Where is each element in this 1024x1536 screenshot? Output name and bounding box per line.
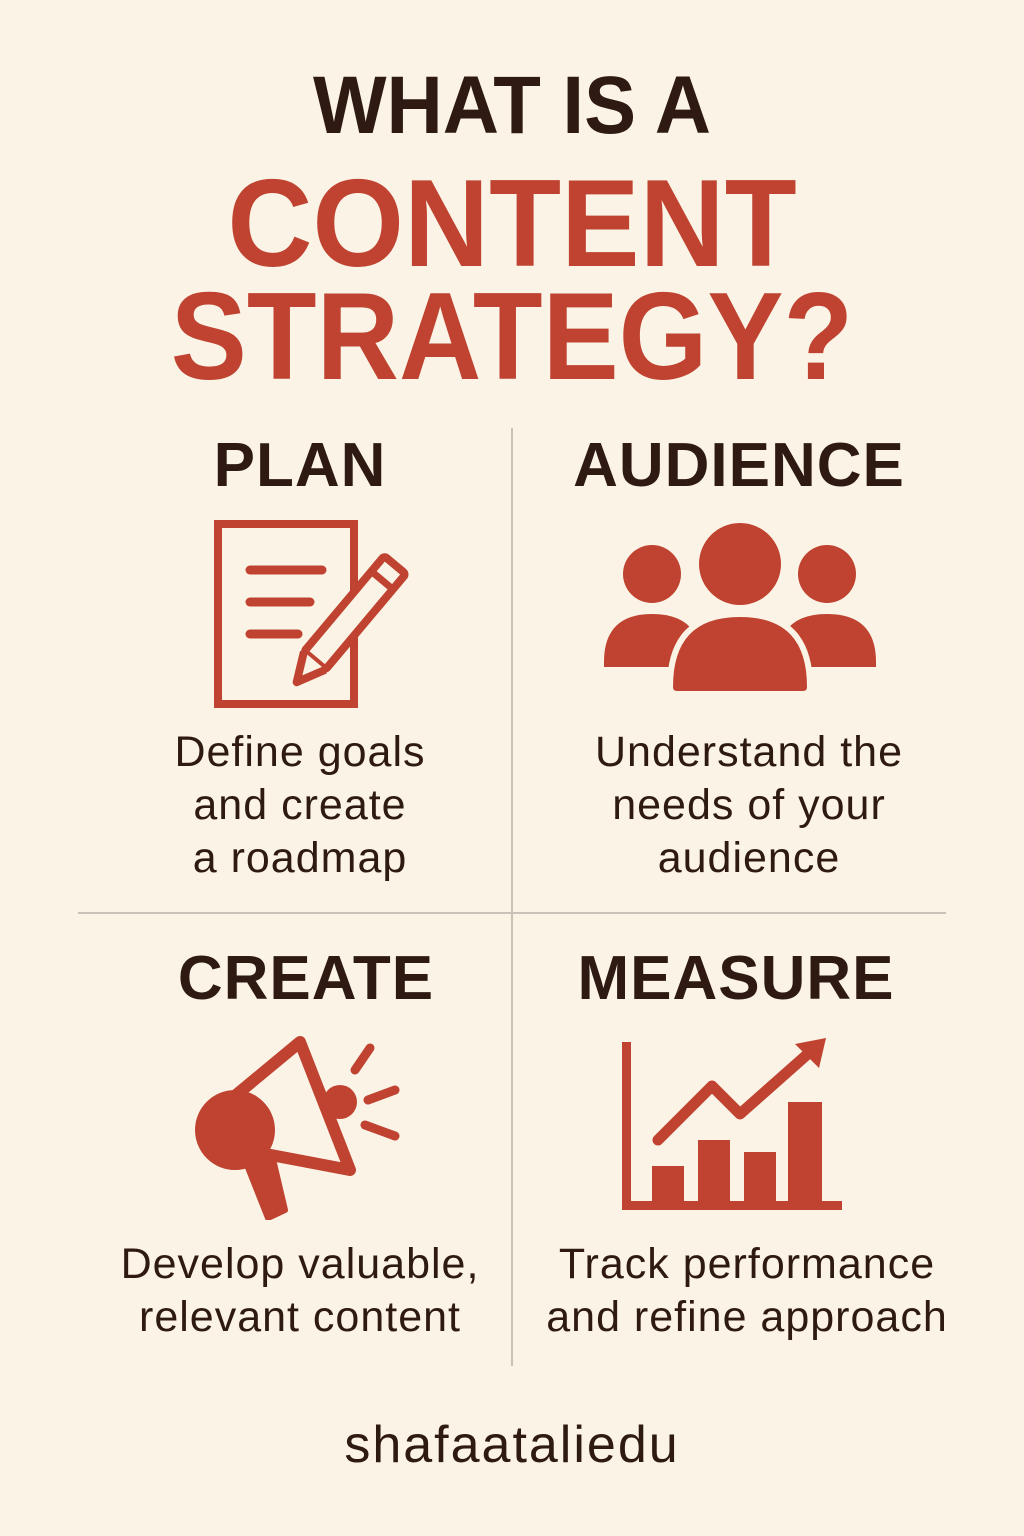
text: audience description: Understand the (595, 728, 903, 776)
text: plan description (174, 728, 426, 882)
panel: audience (573, 431, 905, 882)
panel: measure (546, 944, 948, 1341)
text: create description (121, 1240, 479, 1341)
heading: plan: PLAN (214, 431, 386, 500)
text: plan description: and create (193, 781, 407, 829)
icon: megaphone (195, 1036, 400, 1220)
title: content: CONTENT (227, 155, 797, 293)
text: audience description: needs of your (612, 781, 886, 829)
footer: brand: shafaataliedu (344, 1416, 680, 1474)
panel: create (121, 944, 479, 1341)
text: audience description: audience (658, 834, 840, 882)
panel: plan (174, 431, 426, 882)
heading: audience: AUDIENCE (573, 431, 905, 500)
heading: measure: MEASURE (577, 944, 895, 1013)
text: measure description: and refine approach (546, 1293, 948, 1341)
icon: growth chart (622, 1038, 842, 1210)
icon: document with pencil (214, 520, 408, 708)
text: measure description: Track performance (559, 1240, 935, 1288)
text: plan description: Define goals (174, 728, 426, 776)
text: create description: Develop valuable, (121, 1240, 479, 1288)
title: what is a: WHAT IS A (313, 60, 711, 151)
text: measure description (546, 1240, 948, 1341)
title: strategy: STRATEGY? (171, 268, 853, 406)
text: audience description (595, 728, 903, 882)
icon: people group (604, 523, 876, 691)
text: plan description: a roadmap (193, 834, 407, 882)
text: create description: relevant content (139, 1293, 461, 1341)
heading: create: CREATE (178, 944, 434, 1013)
